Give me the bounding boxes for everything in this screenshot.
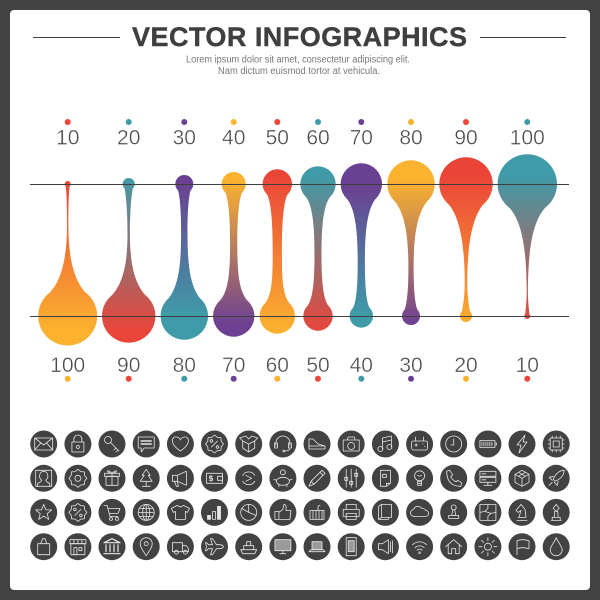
- icon: gamepad: [406, 430, 433, 458]
- icon: piggy bank: [269, 465, 296, 492]
- icon: open box: [235, 430, 262, 458]
- icon: chat bubble: [133, 430, 160, 458]
- icon: star: [30, 499, 57, 526]
- droplet chart: [38, 154, 557, 346]
- icon: flag: [508, 533, 536, 560]
- icon: sliders: [338, 465, 365, 492]
- droplet 30 to 80: [161, 175, 208, 340]
- title: VECTOR INFOGRAPHICS: [132, 22, 467, 52]
- icon: ship: [235, 533, 262, 560]
- icon: house: [440, 533, 467, 560]
- icon: discount badge: [64, 499, 91, 526]
- icon: padlock: [64, 430, 91, 458]
- top value labels: 70: [350, 126, 373, 150]
- bottom value labels: 10: [516, 354, 539, 377]
- icon: key: [98, 430, 126, 458]
- bottom value labels: 100: [50, 354, 85, 377]
- icon: heart: [167, 430, 194, 458]
- droplet 50 to 60: [260, 169, 295, 334]
- droplet 40 to 70: [213, 172, 254, 337]
- icon: percent badge: [201, 430, 228, 458]
- icon: recycle arrows: [235, 465, 262, 492]
- droplet 90 to 20: [439, 157, 493, 322]
- icon: battery: [474, 430, 501, 458]
- bottom value labels: 70: [222, 354, 245, 377]
- icon: desktop monitor: [269, 533, 296, 560]
- icon: wallet: [201, 465, 228, 492]
- icon: pie chart: [235, 499, 262, 526]
- top value labels: 80: [399, 126, 423, 150]
- icon: shopping cart: [98, 499, 126, 526]
- bottom colour dots: [65, 376, 530, 382]
- icon: cloud: [406, 499, 433, 526]
- icon: map pin: [133, 533, 160, 560]
- droplet 70 to 40: [341, 163, 382, 328]
- icon: gift: [98, 465, 126, 492]
- top value labels: [56, 126, 545, 150]
- icon: bank building: [98, 533, 126, 560]
- icon: music note: [372, 430, 399, 458]
- bottom value labels: 90: [117, 354, 140, 377]
- icon: clock: [440, 430, 467, 458]
- bottom value labels: 50: [306, 354, 330, 377]
- icon: light bulb: [406, 465, 433, 492]
- icon: keyboard: [304, 499, 330, 526]
- bottom value labels: [50, 354, 539, 377]
- icon: chess bishop: [543, 499, 570, 526]
- top colour dots: [65, 119, 530, 125]
- droplet 80 to 30: [387, 160, 435, 325]
- bottom value labels: 40: [350, 354, 373, 377]
- icon: microchip: [543, 430, 570, 458]
- top value labels: 90: [454, 126, 478, 150]
- droplet 100 to 10: [498, 154, 557, 319]
- icon: pencil: [304, 465, 330, 492]
- top value labels: 30: [173, 126, 196, 150]
- icon: lightning bolt: [508, 430, 536, 458]
- icon: wifi: [406, 533, 433, 560]
- icon: chess knight: [508, 499, 536, 526]
- icon: globe: [133, 499, 160, 526]
- icon: envelope: [30, 430, 57, 458]
- icon: camera: [338, 430, 365, 458]
- droplet 20 to 90: [102, 178, 155, 343]
- icon: laptop: [304, 533, 330, 560]
- top value labels: 10: [56, 126, 79, 150]
- icon: printer: [338, 499, 365, 526]
- icon: stamp: [440, 499, 467, 526]
- icon: bar chart: [201, 499, 228, 526]
- icon: server: [474, 465, 501, 492]
- bottom value labels: 60: [266, 354, 289, 377]
- bottom value labels: 20: [454, 354, 478, 377]
- icon: t-shirt: [167, 499, 194, 526]
- top value labels: 40: [222, 126, 245, 150]
- icon: cube: [508, 465, 536, 492]
- icon: user portrait: [30, 465, 57, 492]
- top value labels: 60: [306, 126, 330, 150]
- icon: shoe: [304, 430, 330, 458]
- icon: gear: [64, 465, 91, 492]
- subtitle text: Nam dictum euismod tortor at vehicula.: [218, 66, 380, 77]
- icon grid: [30, 430, 570, 560]
- icon: shopping bag: [30, 533, 57, 560]
- icon: airplane: [201, 533, 228, 560]
- icon: puzzle: [474, 499, 501, 526]
- subtitle text: [186, 54, 410, 77]
- icon: storefront: [64, 533, 91, 560]
- icon: phone handset: [440, 465, 467, 492]
- icon: tablet: [338, 533, 365, 560]
- icon: megaphone: [167, 465, 194, 492]
- icon: water drop: [543, 533, 570, 560]
- top value labels: 100: [510, 126, 545, 150]
- icon: thumbs up: [269, 499, 296, 526]
- subtitle text: Lorem ipsum dolor sit amet, consectetur adipiscing elit.: [186, 54, 410, 66]
- icon: speaker: [372, 533, 399, 560]
- icon: document: [372, 465, 399, 492]
- bottom value labels: 30: [399, 354, 423, 377]
- bottom value labels: 80: [173, 354, 196, 377]
- icon: delivery truck: [167, 533, 194, 560]
- icon: tree: [133, 465, 160, 492]
- top value labels: 50: [266, 126, 289, 150]
- icon: book: [372, 499, 399, 526]
- icon: rocket: [543, 465, 570, 492]
- icon: sun: [474, 533, 501, 560]
- icon: headset: [269, 430, 296, 458]
- top value labels: 20: [117, 126, 140, 150]
- droplet 60 to 50: [300, 166, 336, 331]
- droplet 10 to 100: [38, 181, 97, 346]
